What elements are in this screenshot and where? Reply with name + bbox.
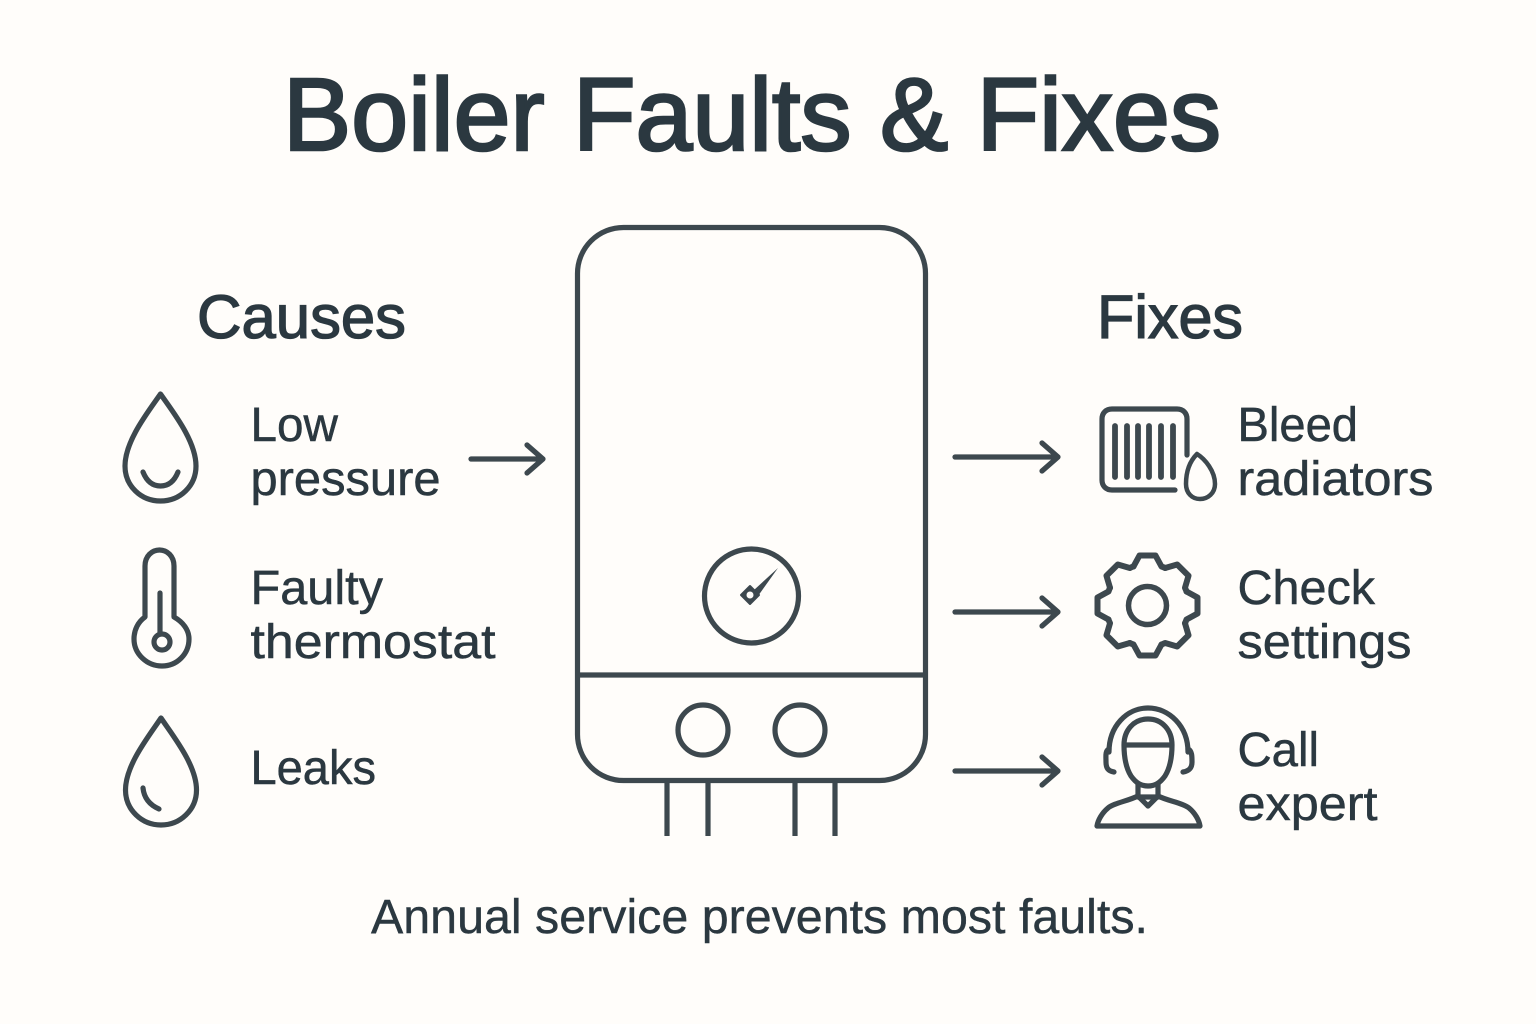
boiler body	[578, 228, 926, 780]
icon: gear	[1098, 556, 1198, 656]
text: leaks: Leaks	[250, 742, 376, 795]
arrow: to check settings	[955, 598, 1058, 626]
text: call expert: Call	[1238, 724, 1319, 777]
text: call expert: expert	[1238, 778, 1378, 831]
panel: causes	[125, 283, 543, 825]
icon: leak drop	[126, 718, 196, 825]
text: low pressure	[250, 399, 440, 506]
boiler illustration	[578, 228, 926, 836]
text: faulty thermostat: thermostat	[250, 616, 496, 669]
arrow: to bleed radiators	[955, 443, 1058, 471]
heading: causes: Causes	[197, 283, 406, 351]
arrow: to call expert	[955, 757, 1058, 785]
icon: radiator with drop	[1102, 409, 1215, 499]
arrow: low pressure to boiler	[471, 445, 543, 473]
text: bleed radiators: radiators	[1238, 453, 1434, 506]
footer note: Annual service prevents most faults.	[371, 891, 1148, 944]
text: call expert	[1238, 724, 1378, 831]
panel: fixes	[955, 283, 1434, 831]
pressure gauge	[704, 549, 798, 643]
icon: thermometer	[134, 550, 189, 666]
text: check settings: Check	[1238, 562, 1376, 615]
text: bleed radiators: Bleed	[1238, 399, 1358, 452]
left knob	[678, 705, 728, 755]
text: faulty thermostat	[250, 562, 496, 669]
pipes	[667, 783, 835, 836]
text: check settings: settings	[1238, 616, 1412, 669]
icon: low pressure drop	[125, 394, 196, 501]
heading: fixes: Fixes	[1097, 283, 1243, 351]
title: Boiler Faults & Fixes	[283, 57, 1221, 172]
text: low pressure: Low	[250, 399, 338, 452]
text: bleed radiators	[1238, 399, 1434, 506]
icon: expert with headset	[1097, 708, 1200, 826]
text: check settings	[1238, 562, 1412, 669]
control panel divider	[578, 672, 925, 678]
text: low pressure: pressure	[250, 453, 440, 506]
right knob	[775, 705, 825, 755]
text: faulty thermostat: Faulty	[250, 562, 383, 615]
